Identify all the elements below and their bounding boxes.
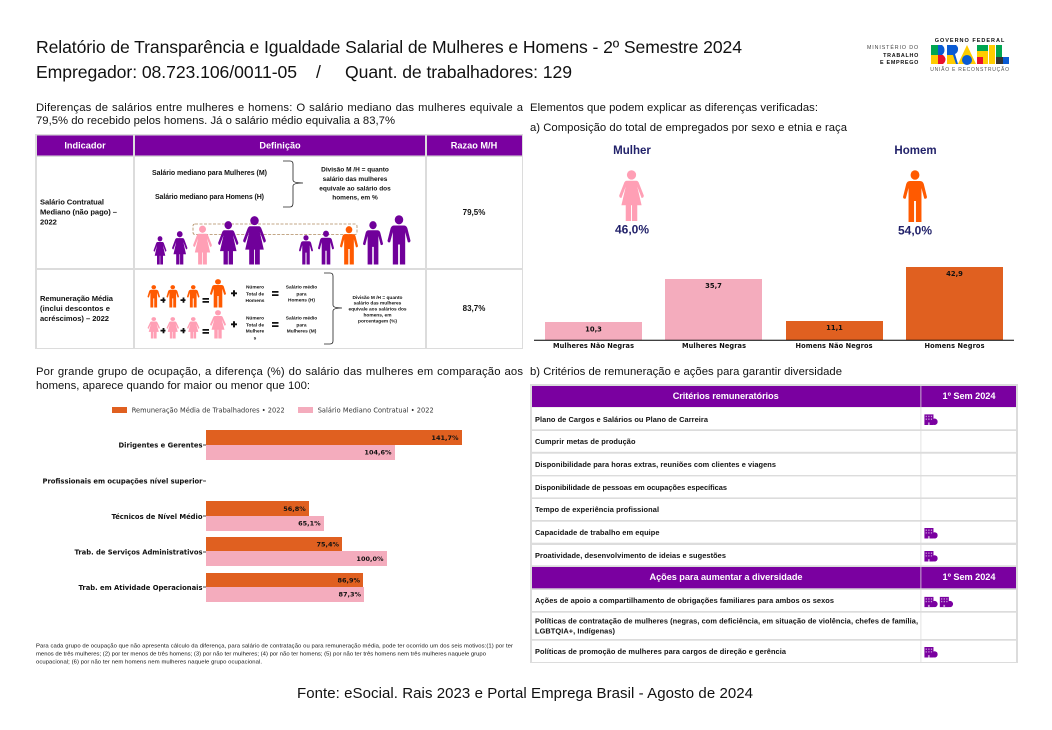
bar chart: composição por sexo e raça: 10,3 — [585, 326, 602, 334]
logo: governo federal brasil: GOVERNO FEDERAL — [935, 38, 1005, 44]
definition: salário mediano: salário das mulheres — [323, 176, 388, 183]
legend — [112, 406, 434, 414]
bar chart: composição por sexo e raça: 35,7 — [705, 282, 722, 290]
footnote — [36, 644, 513, 666]
row label: remuneração média: Remuneração Média — [40, 294, 114, 303]
text: diferenças de salários: Diferenças de salários entre mulheres e homens: O salário mediano das mulheres equivale a — [36, 102, 524, 114]
row label: salário contratual — [40, 198, 117, 226]
definition: remuneração homens: para — [296, 292, 307, 298]
row: pessoas em ocupações — [532, 476, 1016, 497]
row label: remuneração média: acréscimos) – 2022 — [40, 314, 109, 323]
bar chart: grupos de ocupação: 86,9% — [337, 576, 360, 584]
bar chart: grupos de ocupação: Trab. de Serviços Administrativos — [74, 548, 202, 556]
value: 83,7%: 83,7% — [463, 304, 485, 313]
row label: salário contratual: Salário Contratual — [40, 198, 104, 206]
panel: tabela de indicadores — [35, 134, 523, 349]
definition: salário mediano: equivale ao salário dos — [319, 186, 391, 192]
text: por grande grupo de ocupação: homens, aparece quando for maior ou menor que 100: — [36, 380, 310, 392]
bar chart: grupos de ocupação: Dirigentes e Gerentes — [118, 442, 202, 450]
bar chart: grupos de ocupação: 87,3% — [338, 590, 361, 598]
definition: remuneração homens: Salário médio — [286, 284, 317, 290]
table header: Indicador — [64, 140, 106, 150]
value: 46,0%: 46,0% — [615, 222, 649, 236]
row: compartilhamento — [532, 590, 1016, 611]
definition: remuneração mulheres: Total de — [246, 322, 264, 328]
row: políticas de contratação: LGBTQIA+, Indígenas) — [535, 626, 616, 635]
definition: remuneração mulheres — [148, 310, 317, 342]
logo: governo federal brasil: UNIÃO E RECONSTRUÇÃO — [930, 66, 1010, 73]
row: políticas de promoção — [532, 641, 1016, 662]
bar chart: composição por sexo e raça: 11,1 — [826, 324, 843, 332]
definition: salário mediano — [152, 161, 391, 207]
brace and divisão text — [324, 273, 407, 344]
row: políticas de contratação — [532, 613, 1016, 639]
bar chart: grupos de ocupação: Trab. em Atividade Operacionais — [78, 584, 202, 592]
brace and divisão text: salário das mulheres — [354, 300, 402, 306]
bar chart: grupos de ocupação: Profissionais em ocupações nível superior — [42, 478, 203, 486]
text: diferenças de salários: 79,5% do recebido pelos homens. Já o salário médio equivalia a 83,7% — [36, 115, 395, 127]
icon: mulher — [619, 170, 644, 221]
bar chart: composição por sexo e raça: Homens Não Negros — [796, 342, 873, 350]
title: Empregador: 08.723.106/0011-05 — [36, 62, 297, 82]
panel: critérios e ações — [530, 384, 1018, 663]
brace and divisão text: porcentagem (%) — [358, 319, 397, 325]
bar chart: grupos de ocupação: 56,8% — [283, 505, 306, 513]
text: critérios de remuneração: b) Critérios de remuneração e ações para garantir diversidade — [530, 366, 842, 378]
text: elementos que podem explicar: Elementos que podem explicar as diferenças verificadas: — [530, 102, 818, 114]
table header: Definição — [259, 140, 301, 150]
definition: remuneração homens — [148, 279, 317, 308]
bar chart: grupos de ocupação: 75,4% — [316, 540, 339, 548]
row: metas de produção — [532, 431, 1016, 452]
bar chart: composição por sexo e raça: Mulheres Não Negras — [553, 342, 634, 350]
row: pessoas em ocupações: Disponibilidade de pessoas em ocupações específicas — [535, 483, 727, 492]
legend: Remuneração Média de Trabalhadores • 2022 — [132, 406, 285, 414]
text: elementos que podem explicar — [530, 102, 848, 134]
definition: salário mediano: Divisão M /H = quanto — [321, 166, 389, 174]
logo: governo federal brasil — [930, 38, 1010, 73]
bar chart: grupos de ocupação: 141,7% — [431, 434, 459, 442]
logo: ministério — [867, 44, 919, 66]
footnote: menos de três mulheres; (2) por ter menos de três homens; (3) por não ter mulheres; (4) por não ter homens; (5) por não ter três homens nem três mulheres naquele grupo — [36, 652, 487, 658]
heading: homem: Homem — [894, 145, 937, 157]
icons: homens — [299, 215, 410, 264]
table header: Razao M/H — [451, 140, 498, 150]
title: Relatório de Transparência e Igualdade Salarial de Mulheres e Homens - 2º Semestre 2024 — [36, 37, 742, 57]
definition: remuneração mulheres: Mulhere — [246, 328, 265, 334]
row: proatividade — [532, 545, 1016, 565]
logo: ministério: TRABALHO — [883, 53, 919, 59]
definition: salário mediano: homens, em % — [332, 194, 378, 202]
definition: remuneração mulheres: Salário médio — [286, 316, 317, 322]
row: trabalho em equipe: Capacidade de trabalho em equipe — [535, 528, 660, 537]
row: metas de produção: Cumprir metas de produção — [535, 437, 636, 446]
definition: remuneração homens: Total de — [246, 292, 264, 298]
footnote: ocupacional; (6) por não ter nem homens nem mulheres naquele grupo ocupacional. — [36, 660, 262, 666]
row label: salário contratual: Mediano (não pago) – — [40, 208, 117, 216]
brace and divisão text: Divisão M /H = quanto — [353, 295, 403, 301]
row label: remuneração média: (inclui descontos e — [40, 304, 110, 313]
bar chart: grupos de ocupação: Técnicos de Nível Médio — [112, 513, 203, 521]
definition: remuneração homens: Homens — [246, 298, 265, 304]
bar chart: grupos de ocupação: 65,1% — [298, 519, 321, 527]
logo: ministério: MINISTÉRIO DO — [867, 44, 919, 51]
header: critérios remuneratórios — [532, 386, 1016, 407]
value: 79,5%: 79,5% — [463, 208, 485, 217]
bar chart: grupos de ocupação: 104,6% — [364, 448, 392, 456]
definition: remuneração homens: Homens (H) — [288, 298, 315, 304]
header: ações para aumentar a diversidade: 1º Sem 2024 — [942, 572, 996, 582]
definition: remuneração mulheres: s — [254, 336, 257, 342]
value: 54,0%: 54,0% — [898, 224, 932, 238]
footnote: Para cada grupo de ocupação que não apresenta cálculo da diferença, para salário de contratação ou para remuneração média, pode ter ocorrido um dos seis motivos:(1) por ter — [36, 644, 513, 650]
row: compartilhamento: Ações de apoio a compartilhamento de obrigações familiares para ambos os sexos — [535, 596, 834, 605]
title — [36, 37, 742, 82]
brace and divisão text: equivale aos salários dos — [348, 307, 407, 313]
row: tempo de experiência: Tempo de experiência profissional — [535, 505, 659, 514]
text: por grande grupo de ocupação: Por grande grupo de ocupação, a diferença (%) do salário das mulheres em comparação aos — [36, 366, 523, 378]
row: horas extras: Disponibilidade para horas extras, reuniões com clientes e viagens — [535, 460, 776, 469]
row: trabalho em equipe — [532, 522, 1016, 543]
row: políticas de contratação: Políticas de contratação de mulheres (negras, com deficiência, em situação de violência, chefes de família, — [535, 616, 918, 625]
bar chart: composição por sexo e raça: 42,9 — [946, 270, 963, 278]
title: / — [316, 62, 321, 82]
table header — [37, 136, 522, 156]
legend: Salário Mediano Contratual • 2022 — [318, 406, 434, 414]
text: por grande grupo de ocupação — [36, 366, 523, 392]
row: plano de cargos: Plano de Cargos e Salários ou Plano de Carreira — [535, 415, 709, 424]
row: tempo de experiência — [532, 499, 1016, 520]
bar chart: composição por sexo e raça: Homens Negros — [924, 342, 985, 350]
title: Quant. de trabalhadores: 129 — [345, 62, 572, 82]
definition: remuneração mulheres: Número — [246, 316, 264, 322]
text: elementos que podem explicar: a) Composição do total de empregados por sexo e etnia e raça — [530, 122, 848, 134]
row label: salário contratual: 2022 — [40, 218, 57, 226]
definition: remuneração mulheres: Mulheres (M) — [287, 328, 317, 334]
definition: salário mediano: Salário mediano para Mulheres (M) — [152, 170, 267, 177]
row: horas extras — [532, 454, 1016, 475]
row: políticas de promoção: Políticas de promoção de mulheres para cargos de direção e gerência — [535, 647, 787, 656]
definition: remuneração mulheres: para — [296, 322, 307, 328]
header: critérios remuneratórios: Critérios remuneratórios — [673, 391, 779, 401]
text: diferenças de salários — [36, 102, 524, 127]
logo: ministério: E EMPREGO — [880, 60, 919, 66]
dashed comparison box — [193, 224, 357, 234]
definition: remuneração homens: Número — [246, 284, 264, 290]
bar chart: composição por sexo e raça — [534, 267, 1014, 350]
header: ações para aumentar a diversidade: Ações para aumentar a diversidade — [650, 572, 802, 582]
bar chart: composição por sexo e raça: Mulheres Negras — [682, 342, 746, 350]
header: ações para aumentar a diversidade — [532, 567, 1016, 588]
icons: mulheres — [154, 216, 266, 264]
row: proatividade: Proatividade, desenvolvimento de ideias e sugestões — [535, 551, 726, 560]
heading: mulher: Mulher — [613, 145, 651, 157]
row label: remuneração média — [40, 294, 114, 323]
definition: salário mediano: Salário mediano para Homens (H) — [155, 194, 264, 201]
icon: homem — [903, 170, 927, 222]
source: Fonte: eSocial. Rais 2023 e Portal Emprega Brasil - Agosto de 2024 — [297, 685, 753, 702]
brace and divisão text: homens, em — [364, 313, 392, 319]
header: critérios remuneratórios: 1º Sem 2024 — [942, 391, 996, 401]
row: plano de cargos — [532, 408, 1016, 429]
bar chart: grupos de ocupação: 100,0% — [356, 555, 384, 563]
bar chart: grupos de ocupação — [42, 430, 462, 602]
